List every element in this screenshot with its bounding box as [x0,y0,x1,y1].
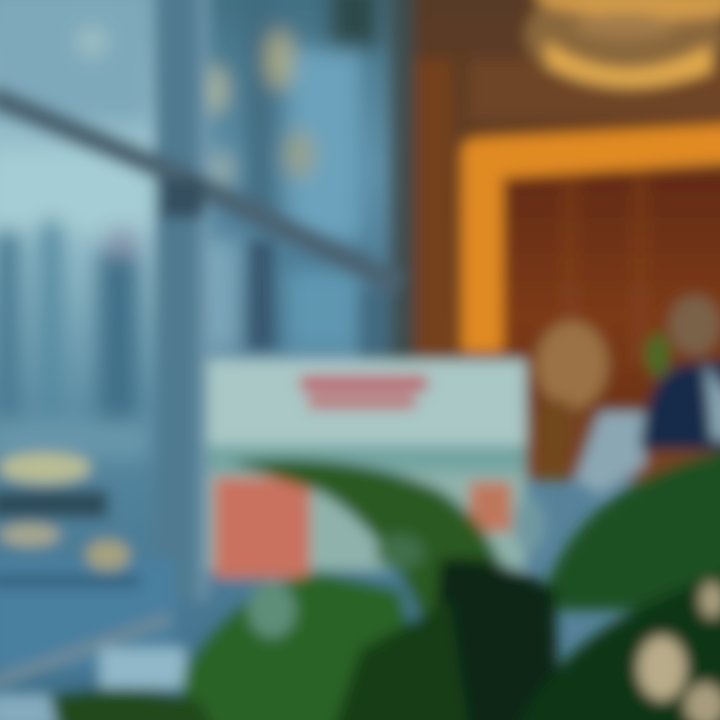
plant pale flowers [638,582,720,720]
window column [155,0,388,600]
background: right wood wall [385,0,720,480]
sign board [208,360,526,578]
background: left window [0,0,420,720]
sign heading smear [300,376,428,409]
middle window [78,0,390,355]
person and background figures [536,295,720,495]
ceiling light [525,0,720,90]
left window details [0,0,150,460]
orange illuminated frame [462,124,720,410]
diagonal rail [0,96,400,285]
lower left table and floor [0,453,175,670]
foreground plant [50,448,720,720]
lower railing [0,618,185,720]
